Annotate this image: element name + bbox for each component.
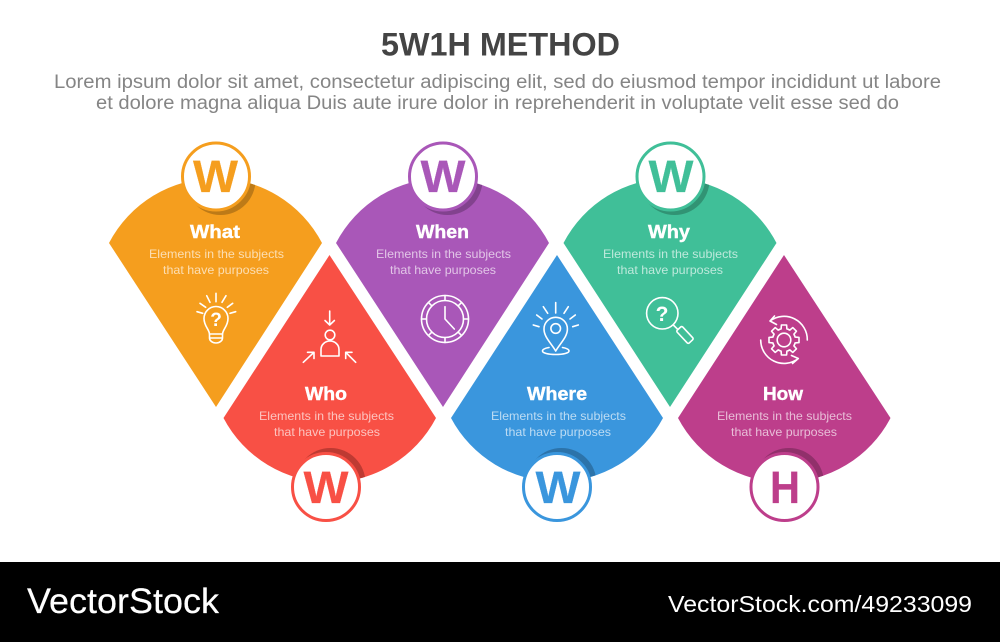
text: where description: Elements in the subjects — [491, 409, 626, 423]
badge: how H — [751, 454, 818, 520]
heading: where: Where — [527, 384, 587, 404]
text: who description — [259, 409, 394, 439]
text: how description — [717, 409, 852, 439]
badge: where W — [524, 454, 590, 520]
text: who description: Elements in the subjects — [259, 409, 394, 423]
badge: when W: W — [420, 151, 466, 202]
text: why description — [603, 247, 738, 277]
title: 5W1H METHOD — [381, 26, 620, 62]
text: why description: that have purposes — [617, 263, 723, 277]
icon: magnifier question — [647, 298, 694, 344]
badge: when W — [410, 143, 476, 210]
subtitle text — [54, 72, 941, 114]
text: who description: that have purposes — [274, 425, 380, 439]
footer logo text: VectorStock — [27, 582, 220, 621]
footer url text: VectorStock.com/49233099 — [668, 591, 972, 617]
text: what description: Elements in the subjects — [149, 247, 284, 261]
icon: magnifier question: ? — [656, 303, 668, 326]
badge: why W — [637, 143, 704, 210]
text: how description: Elements in the subjects — [717, 409, 852, 423]
text: what description: that have purposes — [163, 263, 269, 277]
text: when description: that have purposes — [390, 263, 496, 277]
badge: what W — [182, 143, 250, 210]
heading: what: What — [190, 222, 240, 242]
subtitle text: Lorem ipsum dolor sit amet, consectetur adipiscing elit, sed do eiusmod tempor incididunt ut labore — [54, 72, 941, 93]
panel: who — [224, 255, 436, 520]
text: how description: that have purposes — [731, 425, 837, 439]
text: where description — [491, 409, 626, 439]
heading: how: How — [763, 384, 804, 404]
text: when description — [376, 247, 511, 277]
text: why description: Elements in the subjects — [603, 247, 738, 261]
badge: why W: W — [648, 151, 694, 202]
badge: who W: W — [304, 462, 349, 513]
icon: location pin — [533, 302, 578, 354]
heading: when: When — [416, 222, 469, 242]
panel: when — [336, 143, 549, 407]
badge: where W: W — [536, 462, 581, 513]
icon: person with arrows — [303, 311, 356, 362]
heading: who: Who — [305, 384, 347, 404]
text: where description: that have purposes — [505, 425, 611, 439]
text: when description: Elements in the subjects — [376, 247, 511, 261]
badge: how H: H — [770, 462, 800, 513]
panel: what — [109, 143, 322, 407]
badge: who W — [292, 454, 360, 520]
footer band — [0, 562, 1000, 642]
panel: where — [451, 255, 663, 520]
badge: what W: W — [193, 151, 239, 202]
panel: how — [678, 255, 890, 520]
icon: light bulb question — [197, 293, 236, 343]
subtitle text: et dolore magna aliqua Duis aute irure dolor in reprehenderit in voluptate velit esse sed do — [96, 93, 899, 114]
panel: why — [564, 143, 776, 407]
text: what description — [149, 247, 284, 277]
icon: light bulb question: ? — [210, 310, 222, 331]
heading: why: Why — [648, 222, 690, 242]
icon: clock — [422, 296, 468, 342]
icon: gear with cycle arrows — [761, 316, 807, 364]
